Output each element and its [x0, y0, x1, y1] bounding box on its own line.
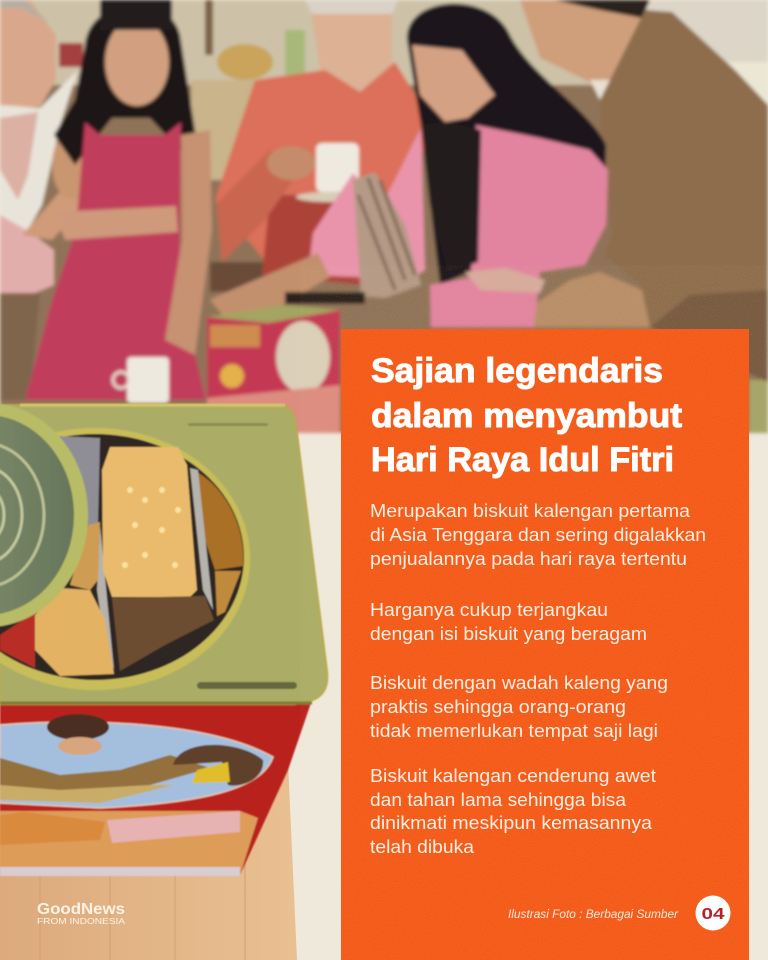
heading: dalam menyambut: [371, 397, 682, 435]
heading: [371, 352, 682, 479]
page number badge: [696, 896, 730, 930]
biscuit tin: [0, 403, 327, 876]
text block 4: dinikmati meskipun kemasannya: [370, 812, 653, 833]
text block 2: Harganya cukup terjangkau: [370, 599, 608, 620]
biscuit: lower cream: [35, 588, 114, 676]
tin lid leaning: [0, 403, 88, 627]
man in brown shirt: [515, 0, 768, 382]
orange text panel: [341, 329, 749, 960]
text block 1: di Asia Tenggara dan sering digalakkan: [370, 524, 706, 545]
heading: Sajian legendaris: [371, 352, 663, 390]
striped cloth: [353, 172, 421, 298]
biscuit: large cream: [102, 447, 197, 597]
text block 2: dengan isi biskuit yang beragam: [370, 623, 647, 644]
small biscuit tin in photo: [207, 305, 340, 433]
logo: GoodNews from Indonesia: [37, 901, 126, 926]
tin seam marks: [197, 682, 297, 689]
biscuit: red wrapper: [0, 612, 35, 668]
text block 1: [370, 500, 706, 569]
text block 1: Merupakan biskuit kalengan pertama: [370, 500, 691, 521]
tin label bottom: [0, 811, 258, 875]
text block 3: [370, 672, 668, 741]
biscuit: chocolate: [112, 596, 214, 671]
woman in pink: [210, 4, 608, 327]
tin body red: [0, 700, 312, 875]
tin opening with biscuits: [0, 428, 250, 690]
text block 3: tidak memerlukan tempat saji lagi: [370, 720, 658, 741]
wooden board: [0, 740, 297, 960]
grandmother: [0, 0, 92, 400]
text block 4: [370, 765, 656, 857]
text block 4: telah dibuka: [370, 836, 475, 857]
text block 3: praktis sehingga orang-orang: [370, 696, 626, 717]
text block 3: Biskuit dengan wadah kaleng yang: [370, 672, 668, 693]
grandfather: [215, 0, 431, 285]
text block 1: penjualannya pada hari raya tertentu: [370, 548, 687, 569]
photo credit: Ilustrasi Foto : Berbagai Sumber: [508, 907, 679, 921]
biscuit: left cream: [70, 522, 100, 590]
logo: GoodNews from Indonesia: FROM INDONESIA: [37, 917, 126, 926]
tin top olive: [0, 405, 327, 704]
tin illustration: [0, 722, 273, 808]
heading: Hari Raya Idul Fitri: [371, 441, 674, 479]
page number badge: 04: [702, 906, 725, 923]
photo: family opening the biscuit tin: [0, 0, 768, 433]
girl: [25, 0, 212, 400]
dark table edge: [285, 292, 365, 304]
logo: GoodNews from Indonesia: GoodNews: [37, 901, 125, 918]
white cup on table: [113, 357, 169, 403]
text block 2: [370, 599, 647, 644]
text block 4: dan tahan lama sehingga bisa: [370, 789, 627, 810]
text block 4: Biskuit kalengan cenderung awet: [370, 765, 656, 786]
